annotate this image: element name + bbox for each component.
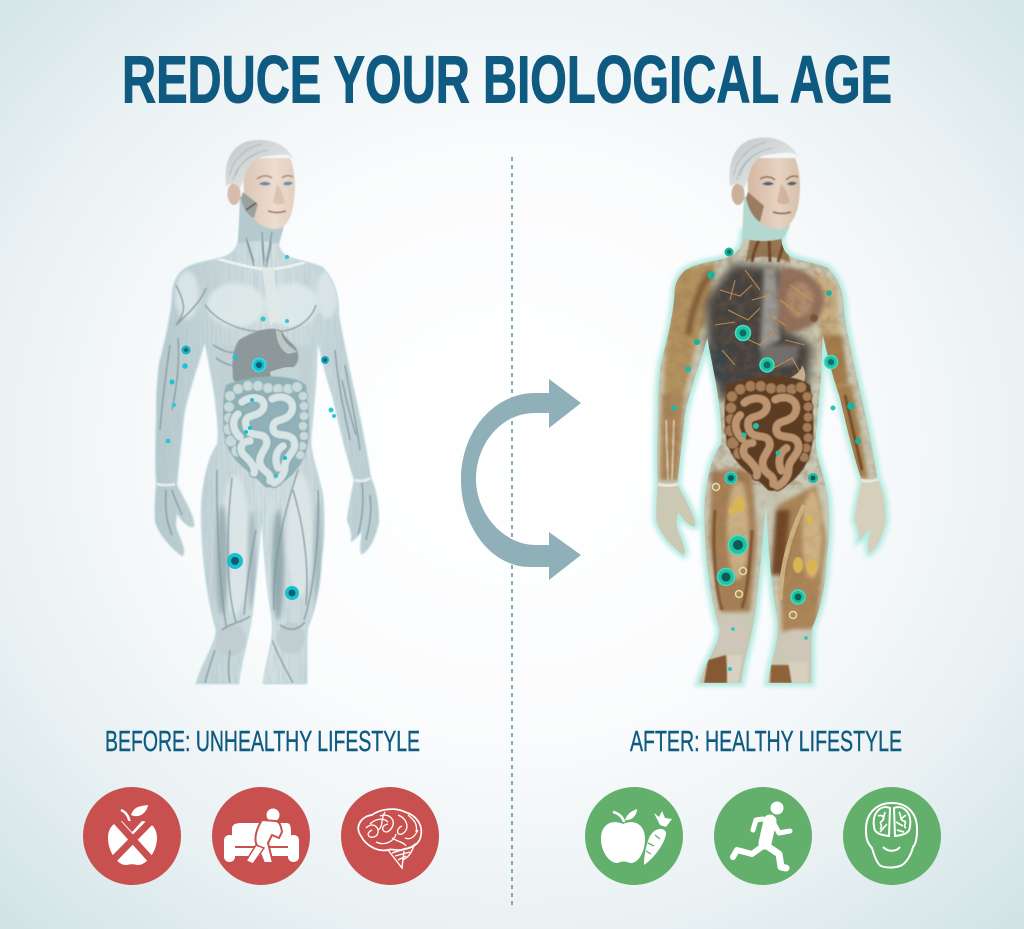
wrist bands	[156, 478, 370, 485]
sternum smear	[760, 268, 780, 350]
head	[226, 140, 295, 262]
icon: smiling head with brain	[843, 787, 941, 885]
right forearm colouring	[832, 385, 868, 478]
orange vessels in chest	[714, 270, 812, 372]
icon: runner	[714, 787, 812, 885]
hands	[656, 484, 696, 555]
center divider dashed line	[511, 157, 513, 906]
neck streaks	[746, 238, 790, 262]
icon: tangled brain	[341, 787, 439, 885]
left upper arm colouring	[664, 262, 716, 400]
body silhouette and muscles	[150, 230, 385, 685]
left forearm colouring	[660, 395, 684, 480]
right upper arm colouring	[812, 268, 848, 385]
muscle lines	[160, 238, 371, 683]
yellow fat deposits	[728, 497, 818, 575]
chest cavity	[706, 264, 812, 400]
right thigh colouring	[778, 485, 826, 632]
green-teal markers	[671, 248, 861, 671]
calves and knees	[704, 655, 728, 683]
clavicle and sternum	[216, 258, 306, 270]
mottled texture	[700, 250, 830, 485]
subtitle: after: AFTER: HEALTHY LIFESTYLE	[630, 726, 902, 758]
ear	[732, 183, 744, 205]
jaw halo	[742, 196, 790, 241]
cheek anatomy	[746, 192, 764, 222]
body fill clipped to silhouette	[656, 238, 886, 683]
face	[244, 158, 295, 229]
hair	[730, 137, 799, 188]
curved double arrow	[461, 379, 581, 580]
body halo	[156, 232, 378, 683]
abdomen shade	[222, 346, 310, 396]
right pectoral	[777, 268, 824, 332]
eyes, nose and mouth	[762, 182, 797, 186]
eyes, nose and mouth	[259, 182, 293, 186]
icon: crossed-out apple	[83, 787, 181, 885]
icon: person on couch	[212, 787, 310, 885]
hair	[226, 140, 294, 188]
intestines	[725, 376, 813, 491]
face	[748, 158, 800, 229]
ear	[228, 183, 240, 205]
teal markers	[166, 255, 336, 600]
figure: after body, exposed warm anatomy with cyan glow	[645, 137, 896, 685]
liver and stomach	[233, 329, 298, 383]
cheek anatomy	[241, 192, 258, 218]
liver fold	[772, 365, 805, 391]
figure: before body, pale grey-blue anatomy	[150, 140, 385, 685]
head	[730, 137, 800, 241]
intestines	[223, 376, 309, 488]
subtitle: before: BEFORE: UNHEALTHY LIFESTYLE	[105, 726, 420, 758]
thigh forms	[224, 475, 248, 614]
body glow	[656, 232, 885, 683]
neck	[238, 196, 284, 244]
left thigh colouring	[709, 470, 757, 612]
chest highlights	[207, 283, 265, 327]
icon: apple and carrot	[585, 787, 683, 885]
muscle fibres	[211, 243, 328, 683]
